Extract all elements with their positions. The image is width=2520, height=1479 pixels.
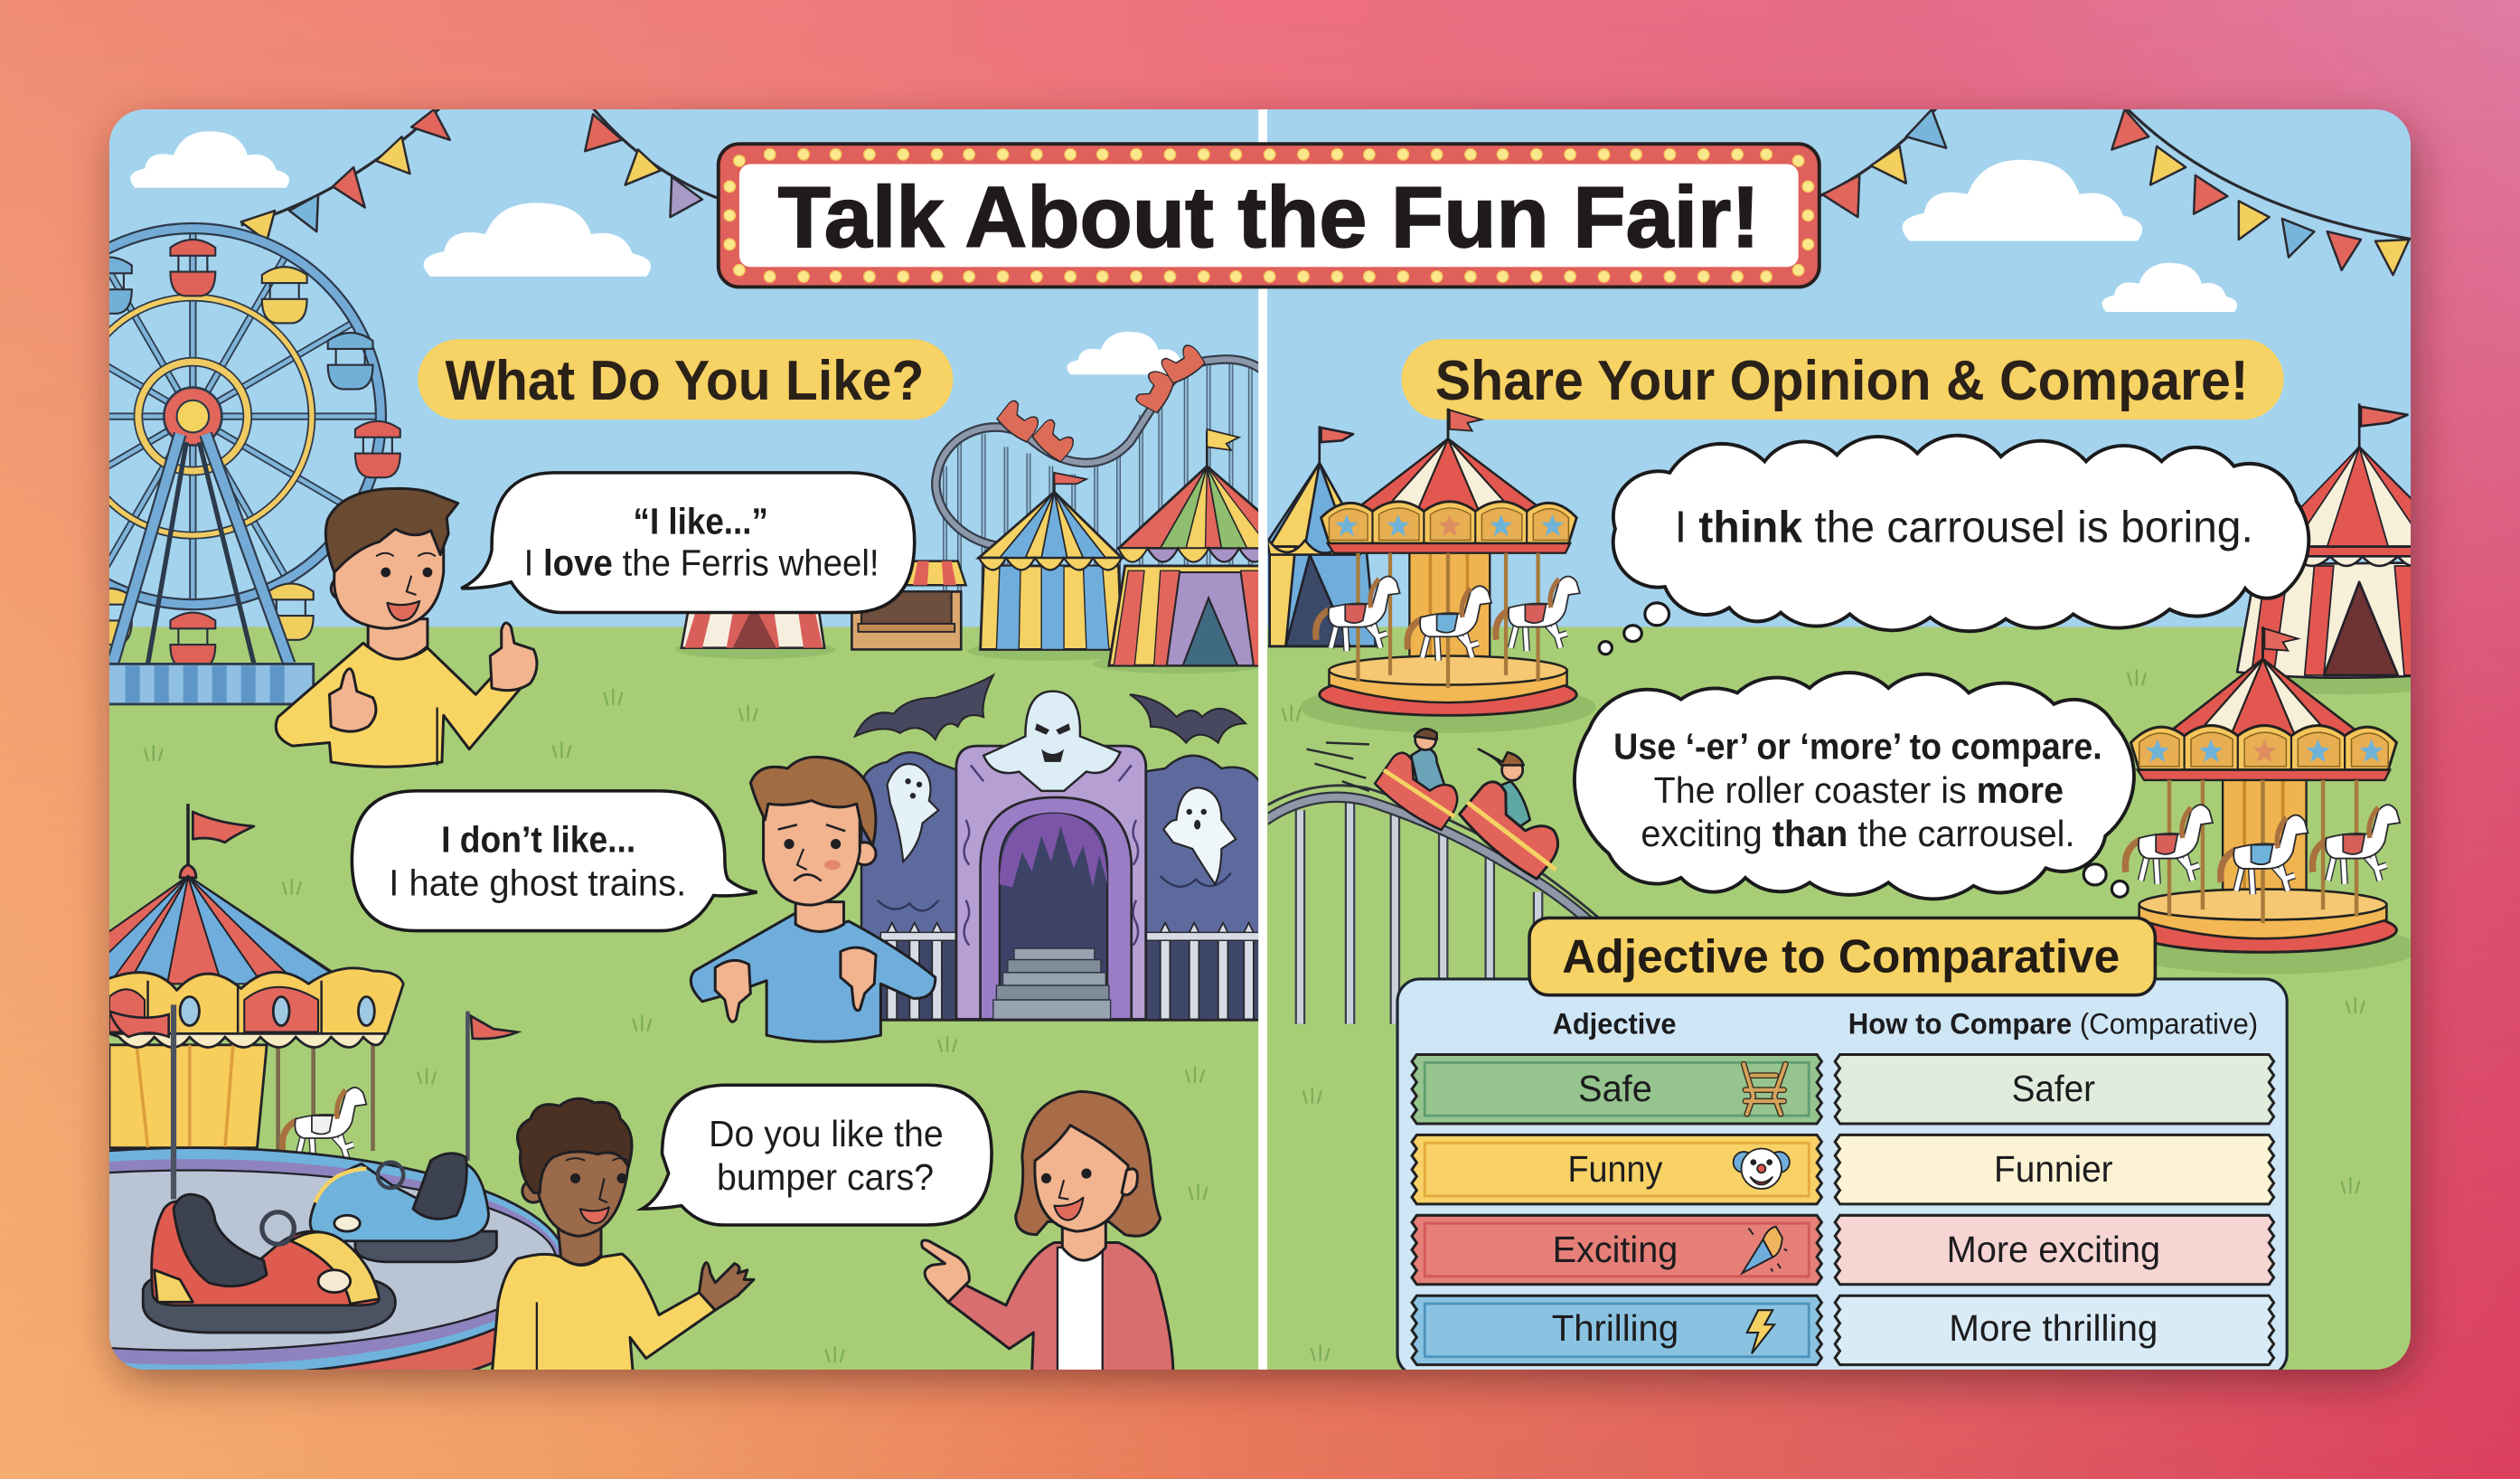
- carousel two: [2118, 626, 2421, 975]
- left carousel: [97, 804, 403, 1163]
- row safe: Safer: [2012, 1068, 2095, 1109]
- red and white tent right panel: [2237, 403, 2459, 694]
- thought bubble 2: exciting than the carrousel.: [1641, 813, 2074, 854]
- boy 3: dark curly hair, yellow shirt: [492, 1098, 754, 1376]
- coaster car one with rider: [1373, 729, 1465, 834]
- speech bubble 2: I don’t like...: [441, 818, 635, 860]
- row exciting: [1412, 1215, 2274, 1285]
- roller coaster background: [931, 344, 1258, 594]
- speech bubble 1: [461, 473, 915, 613]
- red, green and yellow big top tent: [1093, 429, 1302, 674]
- bat right: [1130, 694, 1246, 743]
- bunting left two: [585, 106, 717, 217]
- thought bubble 2: The roller coaster is more: [1654, 769, 2064, 811]
- row thrilling: [1412, 1295, 2274, 1365]
- row exciting: More exciting: [1947, 1229, 2160, 1270]
- table heading tab: Adjective to Comparative: [1562, 929, 2120, 982]
- arena flag pole left: [109, 1004, 174, 1200]
- title marquee sign: [719, 144, 1819, 287]
- row funny: Funnier: [1994, 1148, 2113, 1190]
- blue bumper car: [310, 1154, 496, 1262]
- cloud right small: [2102, 263, 2237, 312]
- sky and grass backdrop: [109, 109, 2411, 1370]
- pointing hand: [922, 1240, 969, 1302]
- speech bubble 2: I hate ghost trains.: [389, 862, 686, 903]
- grass tufts left: [145, 690, 1207, 1361]
- grass tufts right: [1283, 671, 2365, 1360]
- woman pointing: [922, 1091, 1173, 1376]
- boy 2: thumbs down, blue shirt: [691, 757, 936, 1041]
- bunting right two: [2111, 106, 2414, 275]
- speech bubble 3: bumper cars?: [717, 1156, 934, 1198]
- thought bubble 2: Use ‘-er’ or ‘more’ to compare.: [1613, 725, 2102, 767]
- bunting left one: [241, 106, 450, 241]
- cloud behind coaster: [1067, 332, 1191, 374]
- thought dots 2: [2083, 864, 2128, 897]
- row safe: Safe: [1578, 1068, 1652, 1109]
- cloud right large: [1903, 160, 2142, 240]
- heading pill: what do you like: What Do You Like?: [446, 350, 924, 412]
- arena flag pole right: [467, 1011, 518, 1161]
- coaster cars: [995, 342, 1207, 464]
- column header comparative: How to Compare (Comparative): [1848, 1007, 2258, 1040]
- row safe: [1412, 1054, 2274, 1124]
- panel: comparison table: [1397, 918, 2287, 1376]
- icon: party popper: [1742, 1227, 1787, 1273]
- gate: [956, 746, 1146, 1019]
- dark cloud backdrop: [860, 752, 1264, 1019]
- ghost left: [887, 764, 938, 862]
- bunting right one: [1819, 106, 1946, 217]
- title marquee sign: Talk About the Fun Fair!: [778, 169, 1760, 266]
- hand right thumbs up: [490, 623, 537, 691]
- hand open: [699, 1263, 754, 1310]
- fence: [880, 923, 1260, 1019]
- ferris wheel base: [97, 664, 314, 704]
- thought bubble 1: [1613, 436, 2308, 631]
- cloud middle: [424, 203, 651, 277]
- boy 1: thumbs up, yellow shirt: [276, 488, 537, 767]
- thought bubble 2: [1575, 673, 2134, 899]
- speech bubble 1: “I like...”: [634, 500, 768, 542]
- card shadow: [116, 126, 2414, 1380]
- row thrilling: Thrilling: [1552, 1307, 1678, 1349]
- marquee bulbs: [724, 149, 1814, 282]
- panel: left scene, what do you like: [0, 106, 1302, 1408]
- icon: lightning bolt: [1747, 1310, 1774, 1353]
- ghost train: [855, 675, 1264, 1020]
- ghost right: [1163, 787, 1236, 884]
- stairs: [993, 948, 1111, 1019]
- speech bubble 3: Do you like the: [709, 1113, 944, 1154]
- roller coaster foreground: [1262, 729, 1601, 1024]
- icon: clown: [1734, 1149, 1790, 1189]
- speech bubble 2: [352, 791, 757, 931]
- icon: harness: [1744, 1064, 1785, 1114]
- speech bubble 1: I love the Ferris wheel!: [524, 542, 879, 584]
- bumper car arena: [0, 1148, 566, 1408]
- white centre divider: [1258, 109, 1267, 1370]
- speech bubble 3: [642, 1085, 992, 1225]
- row thrilling: More thrilling: [1949, 1307, 2158, 1349]
- blue and yellow tent: [967, 473, 1134, 661]
- hand right thumbs down: [841, 947, 876, 1011]
- panel: right scene, share your opinion: [1254, 106, 2459, 1376]
- red bumper car: [143, 1194, 395, 1333]
- hand left thumbs up: [330, 669, 376, 731]
- cloud top left: [130, 131, 289, 188]
- speed lines: [1307, 743, 1369, 791]
- coaster car two with rider: [1456, 749, 1568, 882]
- row funny: Funny: [1567, 1148, 1663, 1190]
- skull ghost on top of gate: [983, 692, 1120, 791]
- carousel one: [1300, 409, 1596, 733]
- bat left: [855, 675, 993, 740]
- thought dots 1: [1599, 603, 1669, 655]
- table heading tab: [1529, 918, 2155, 995]
- row funny: [1412, 1135, 2274, 1204]
- food booth: [851, 561, 966, 649]
- column header adjective: Adjective: [1553, 1007, 1677, 1040]
- ferris wheel: [108, 222, 401, 705]
- heading pill: share your opinion: Share Your Opinion & Compare!: [1435, 350, 2249, 412]
- hand left thumbs down: [715, 960, 750, 1022]
- thought bubble 1: I think the carrousel is boring.: [1675, 503, 2253, 551]
- row exciting: Exciting: [1553, 1229, 1678, 1270]
- blue and yellow tent right panel: [1254, 426, 1376, 646]
- striped tent behind bubble: [675, 614, 835, 659]
